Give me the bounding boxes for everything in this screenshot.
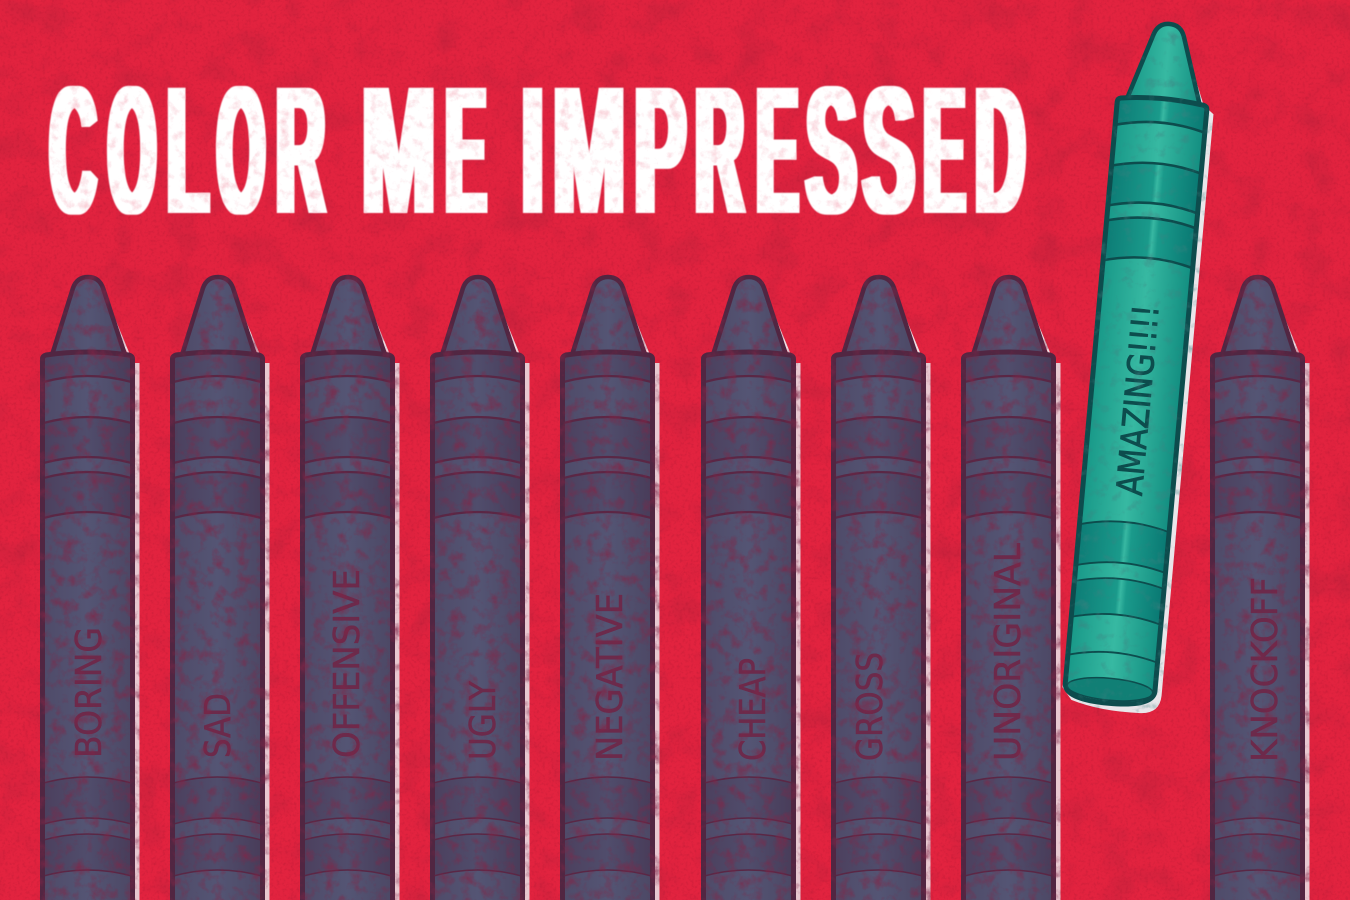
title bbox=[50, 48, 1025, 253]
title: M bbox=[553, 50, 625, 253]
title: D bbox=[975, 49, 1025, 253]
crayon label: AMAZING!!!! bbox=[1110, 303, 1168, 497]
crayon: knockoff: KNOCKOFF bbox=[1245, 577, 1286, 762]
crayon: unoriginal: UNORIGINAL bbox=[988, 543, 1029, 761]
crayon: boring bbox=[40, 277, 140, 900]
title: I bbox=[522, 48, 543, 252]
crayon: sad: SAD bbox=[198, 693, 239, 758]
crayon: sad bbox=[170, 277, 270, 900]
title: E bbox=[446, 48, 486, 252]
crayon: cheap: CHEAP bbox=[733, 658, 774, 761]
title: R bbox=[276, 50, 325, 253]
title: S bbox=[863, 48, 915, 252]
title: C bbox=[50, 49, 96, 252]
crayon tip bbox=[1127, 21, 1207, 105]
crayon: ugly: UGLY bbox=[463, 680, 504, 760]
highlighted teal crayon: amazing bbox=[1061, 20, 1221, 715]
crayon body and bands bbox=[1061, 87, 1211, 707]
title: P bbox=[635, 49, 686, 252]
crayon: gross: GROSS bbox=[850, 652, 891, 761]
row of grey crayons bbox=[40, 277, 1310, 900]
title: M bbox=[362, 49, 435, 252]
title: O bbox=[217, 48, 265, 252]
title: E bbox=[924, 48, 965, 252]
crayon shadow bbox=[1061, 30, 1220, 715]
crayon: negative: NEGATIVE bbox=[590, 593, 631, 761]
crayon: cheap bbox=[701, 277, 800, 900]
title: O bbox=[108, 48, 156, 252]
crayon: negative bbox=[560, 277, 660, 900]
crayon: unoriginal bbox=[961, 277, 1060, 900]
crayon: ugly bbox=[430, 277, 530, 900]
title: S bbox=[806, 49, 857, 252]
title: L bbox=[167, 50, 208, 253]
crayon: gross bbox=[831, 277, 930, 900]
crayon: boring: BORING bbox=[69, 627, 110, 758]
title: R bbox=[695, 50, 744, 253]
crayon: offensive bbox=[300, 277, 400, 900]
title: E bbox=[757, 48, 798, 252]
crayon: knockoff bbox=[1210, 277, 1310, 900]
crayon: offensive: OFFENSIVE bbox=[327, 569, 368, 758]
